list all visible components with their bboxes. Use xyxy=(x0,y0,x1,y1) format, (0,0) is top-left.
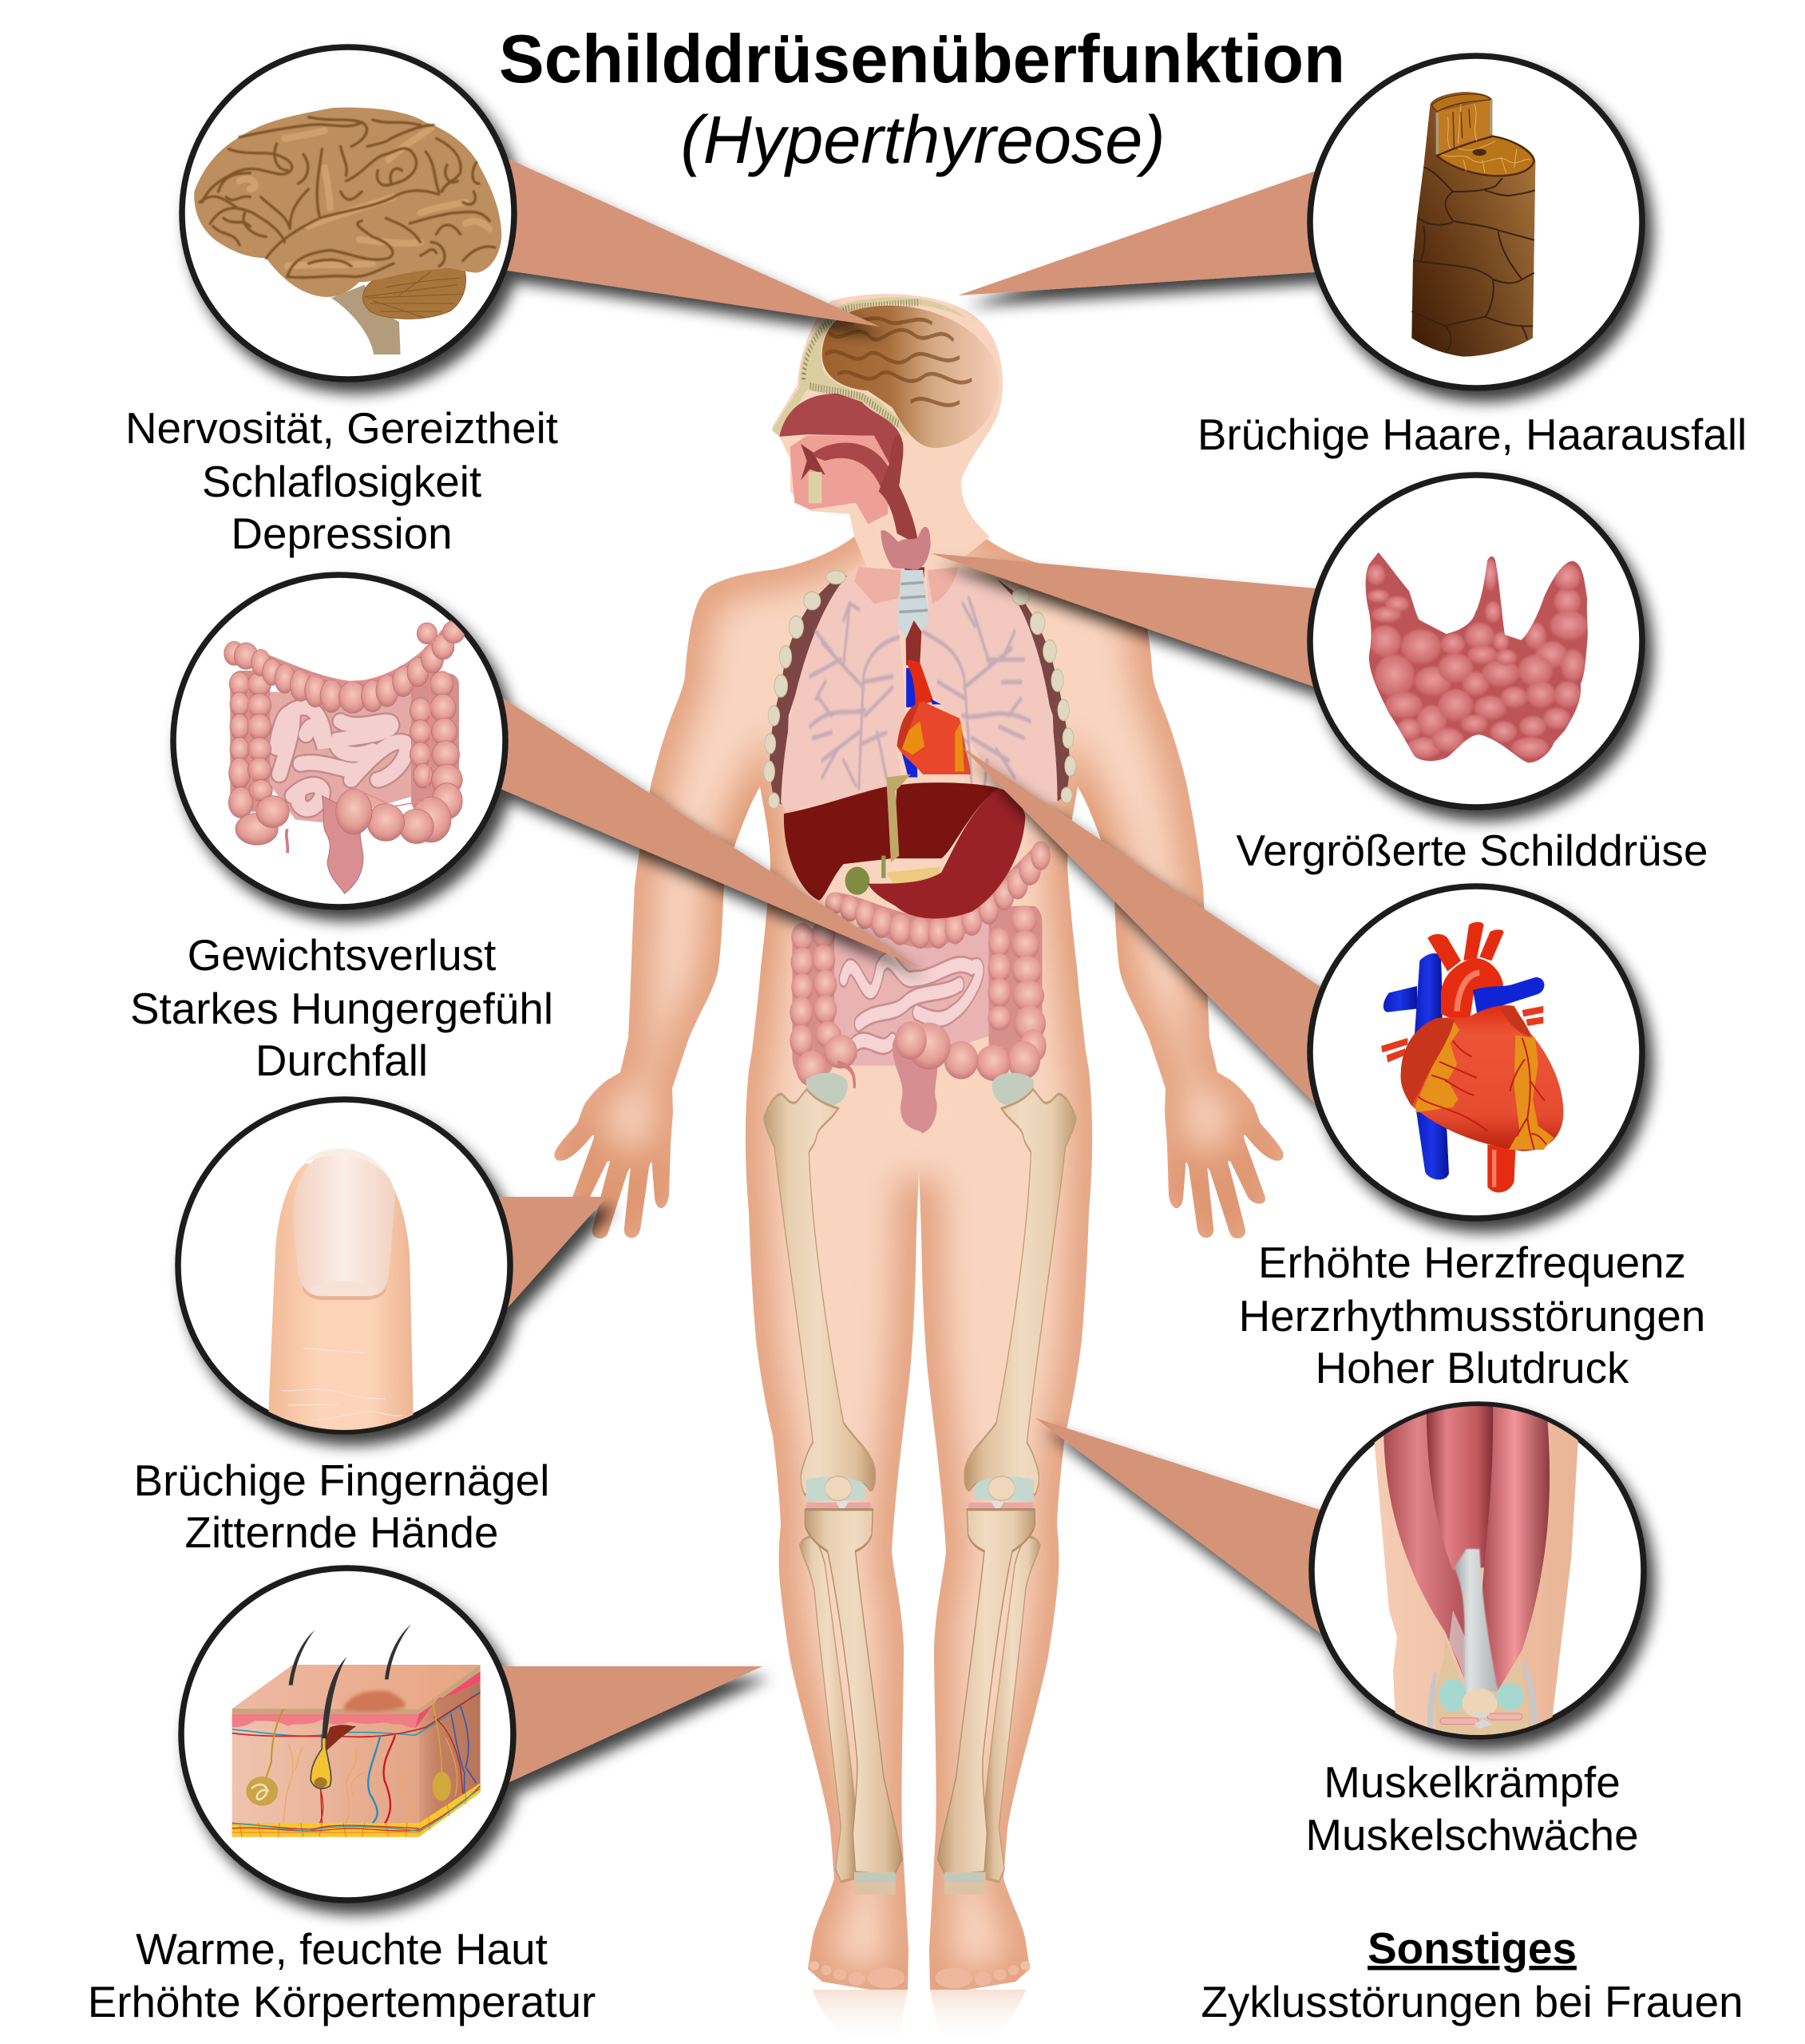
body skin: right half xyxy=(919,519,1284,1990)
panel: brain callout xyxy=(125,47,880,558)
caption: brain: Schlaflosigkeit xyxy=(202,457,481,506)
pharynx xyxy=(879,435,918,545)
caption: skin: Erhöhte Körpertemperatur xyxy=(88,1977,596,2026)
floor reflection of feet xyxy=(813,1990,1026,2044)
icon: heart xyxy=(1381,922,1563,1192)
caption: muscle: Muskelschwäche xyxy=(1305,1810,1639,1860)
caption: muscle: Muskelkrämpfe xyxy=(1324,1757,1621,1807)
caption: nail: Zitternde Hände xyxy=(185,1507,498,1557)
callout frame: skin xyxy=(181,1568,762,1900)
lungs xyxy=(770,567,1071,811)
other symptoms note: Sonstiges xyxy=(1368,1923,1577,1973)
caption: brain xyxy=(125,403,558,558)
caption: skin: Warme, feuchte Haut xyxy=(136,1924,548,1974)
panel: skin callout xyxy=(88,1568,762,2026)
body skin: left half xyxy=(554,519,919,1990)
caption: heart: Herzrhythmusstörungen xyxy=(1239,1291,1705,1341)
other symptoms note xyxy=(1201,1923,1744,2026)
icon: skin cross-section xyxy=(232,1624,481,1837)
caption: heart: Hoher Blutdruck xyxy=(1316,1343,1629,1392)
callout frame: intestine xyxy=(173,575,920,968)
icon: thigh muscles xyxy=(1372,1403,1578,1749)
icon: fingernail xyxy=(267,1148,414,1437)
panel: gut callout xyxy=(130,575,920,1085)
leg skeleton: right xyxy=(935,1073,1076,1988)
other symptoms note: Zyklusstörungen bei Frauen xyxy=(1201,1977,1744,2026)
thyroid gland xyxy=(881,527,931,570)
liver xyxy=(784,782,999,901)
caption: skin xyxy=(88,1924,596,2026)
callout frame: muscle xyxy=(1035,1404,1644,1737)
head and neck xyxy=(772,294,1003,575)
subtitle: (Hyperthyreose) xyxy=(680,101,1166,177)
head and torso organs xyxy=(764,297,1076,1134)
panel: thyroid callout xyxy=(931,475,1708,875)
human figure xyxy=(554,294,1284,2044)
caption: intestine: Durchfall xyxy=(255,1036,428,1085)
callout frame: nail xyxy=(178,1099,607,1432)
callout frame: hair xyxy=(958,56,1642,388)
pancreas xyxy=(886,867,941,885)
panel: muscle callout xyxy=(1035,1403,1644,1860)
icon: hair shaft xyxy=(1411,92,1535,357)
icon: brain xyxy=(194,108,501,355)
icon: thyroid xyxy=(1366,553,1588,763)
callout frame: thyroid xyxy=(931,475,1642,807)
heart xyxy=(897,660,971,777)
panel: hair callout xyxy=(958,56,1747,459)
leg skeleton: left xyxy=(764,1073,904,1988)
rib ends xyxy=(764,571,1076,809)
icon: intestine xyxy=(224,620,465,893)
callout frame: brain xyxy=(182,47,880,379)
mouth and tongue xyxy=(790,436,889,524)
caption: intestine xyxy=(130,930,553,1085)
trachea xyxy=(897,570,929,638)
groin highlight xyxy=(823,1054,1015,1166)
caption: nail xyxy=(134,1456,549,1557)
caption: brain: Nervosität, Gereiztheit xyxy=(125,403,558,453)
caption: thyroid: Vergrößerte Schilddrüse xyxy=(1237,826,1708,875)
colon xyxy=(790,841,1051,1134)
caption: hair: Brüchige Haare, Haarausfall xyxy=(1197,410,1747,459)
caption: heart xyxy=(1239,1238,1705,1392)
bile duct band xyxy=(886,774,911,862)
caption: intestine: Gewichtsverlust xyxy=(188,930,496,980)
caption: nail: Brüchige Fingernägel xyxy=(134,1456,549,1505)
torso centre fill xyxy=(910,511,928,1142)
brain xyxy=(822,306,999,448)
panel: heart callout xyxy=(961,747,1705,1392)
caption: brain: Depression xyxy=(231,509,453,558)
nasal cavity xyxy=(779,394,903,489)
oesophagus xyxy=(904,567,924,665)
caption: muscle xyxy=(1305,1757,1639,1860)
caption: heart: Erhöhte Herzfrequenz xyxy=(1258,1238,1686,1287)
appendix xyxy=(837,1063,854,1088)
title: Schilddrüsenüberfunktion xyxy=(499,22,1345,97)
panel: fingernail callout xyxy=(134,1099,607,1557)
callout frame: heart xyxy=(961,747,1642,1218)
caption: intestine: Starkes Hungergefühl xyxy=(130,984,553,1033)
skull xyxy=(772,297,966,437)
gallbladder xyxy=(845,856,885,895)
small intestine xyxy=(834,920,993,1066)
stomach xyxy=(868,788,1025,918)
